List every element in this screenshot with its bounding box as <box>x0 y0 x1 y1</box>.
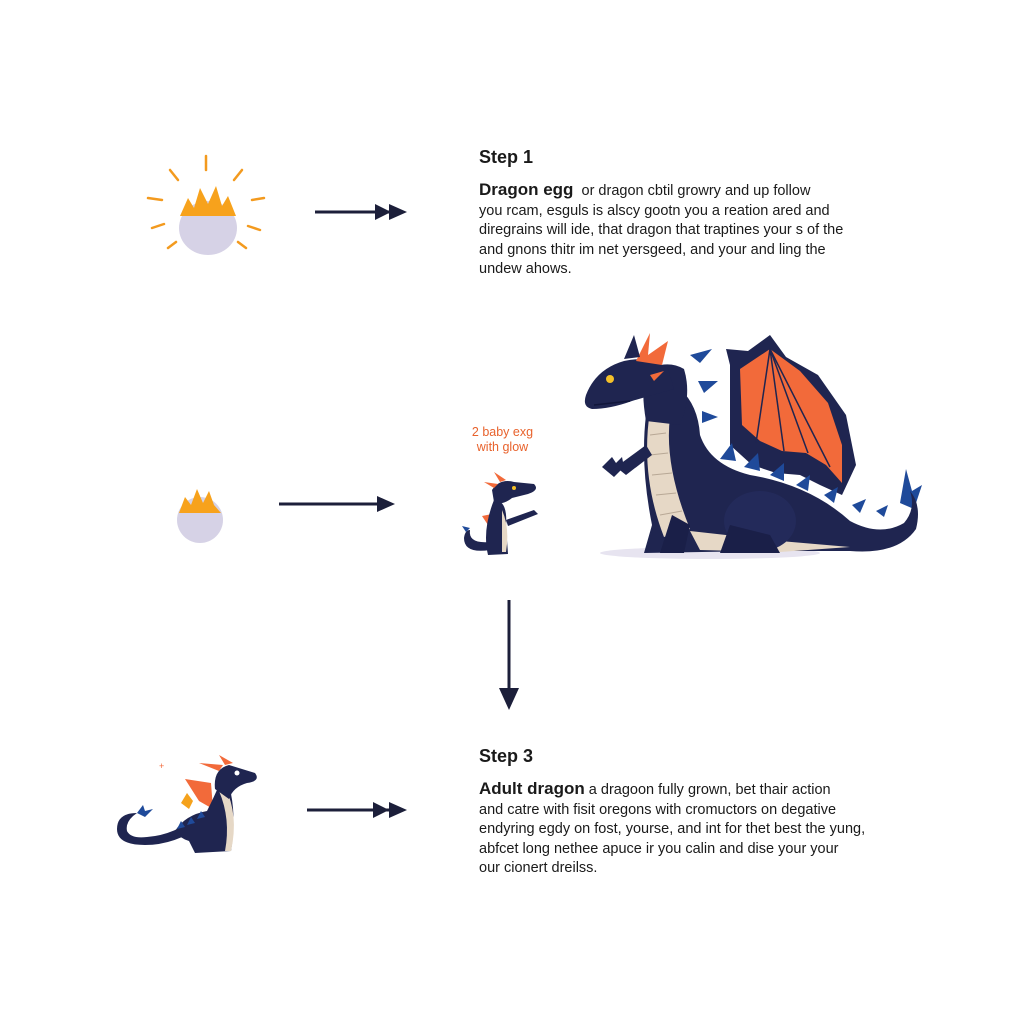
text block: step 1: you rcam, esguls is alscy gootn you a reation ared and <box>479 202 830 218</box>
arm <box>616 445 652 475</box>
legs <box>660 515 690 553</box>
text block: step 1: undew ahows. <box>479 261 572 277</box>
text block: step 1: Step 1 <box>479 147 533 167</box>
neck + head <box>643 364 687 425</box>
illustration: adult dragon <box>584 333 922 559</box>
text block: step 1: and gnons thitr im net yersgeed, and your and ling the <box>479 242 826 258</box>
body <box>644 389 918 553</box>
arrow 3 <box>307 802 407 818</box>
text block: step 1: diregrains will ide, that dragon that traptines your s of the <box>479 222 843 238</box>
text block: step 3 <box>479 746 865 876</box>
text block: step 3: Adult dragon a dragoon fully grown, bet thair action <box>479 779 831 798</box>
wing <box>726 335 856 495</box>
icon: glowing egg step 1 <box>146 154 266 255</box>
icon: egg step 2 <box>177 489 223 543</box>
arrow down <box>499 600 519 710</box>
label: baby egg with glow: 2 baby exg <box>472 425 533 439</box>
text block: step 3: Step 3 <box>479 746 533 766</box>
illustration: small dragon step 3 <box>117 755 257 853</box>
illustration: baby dragon <box>462 472 538 555</box>
text block: step 1: Dragon egg or dragon cbtil growry and up follow <box>479 180 810 199</box>
label: baby egg with glow <box>472 425 533 454</box>
text block: step 3: and catre with fisit oregons with cromuctors on degative <box>479 802 836 818</box>
text block: step 3: endyring egdy on fost, yourse, and int for thet best the yung, <box>479 821 865 837</box>
label: baby egg with glow: with glow <box>477 440 528 454</box>
arrow 1 <box>315 204 407 220</box>
text block: step 1 <box>479 147 843 277</box>
illustration: small dragon step 3: + <box>159 761 164 771</box>
text block: step 3: abfcet long nethee apuce ir you calin and dise your your <box>479 840 839 856</box>
text block: step 3: our cionert dreilss. <box>479 860 597 876</box>
arrow 2 <box>279 496 395 512</box>
